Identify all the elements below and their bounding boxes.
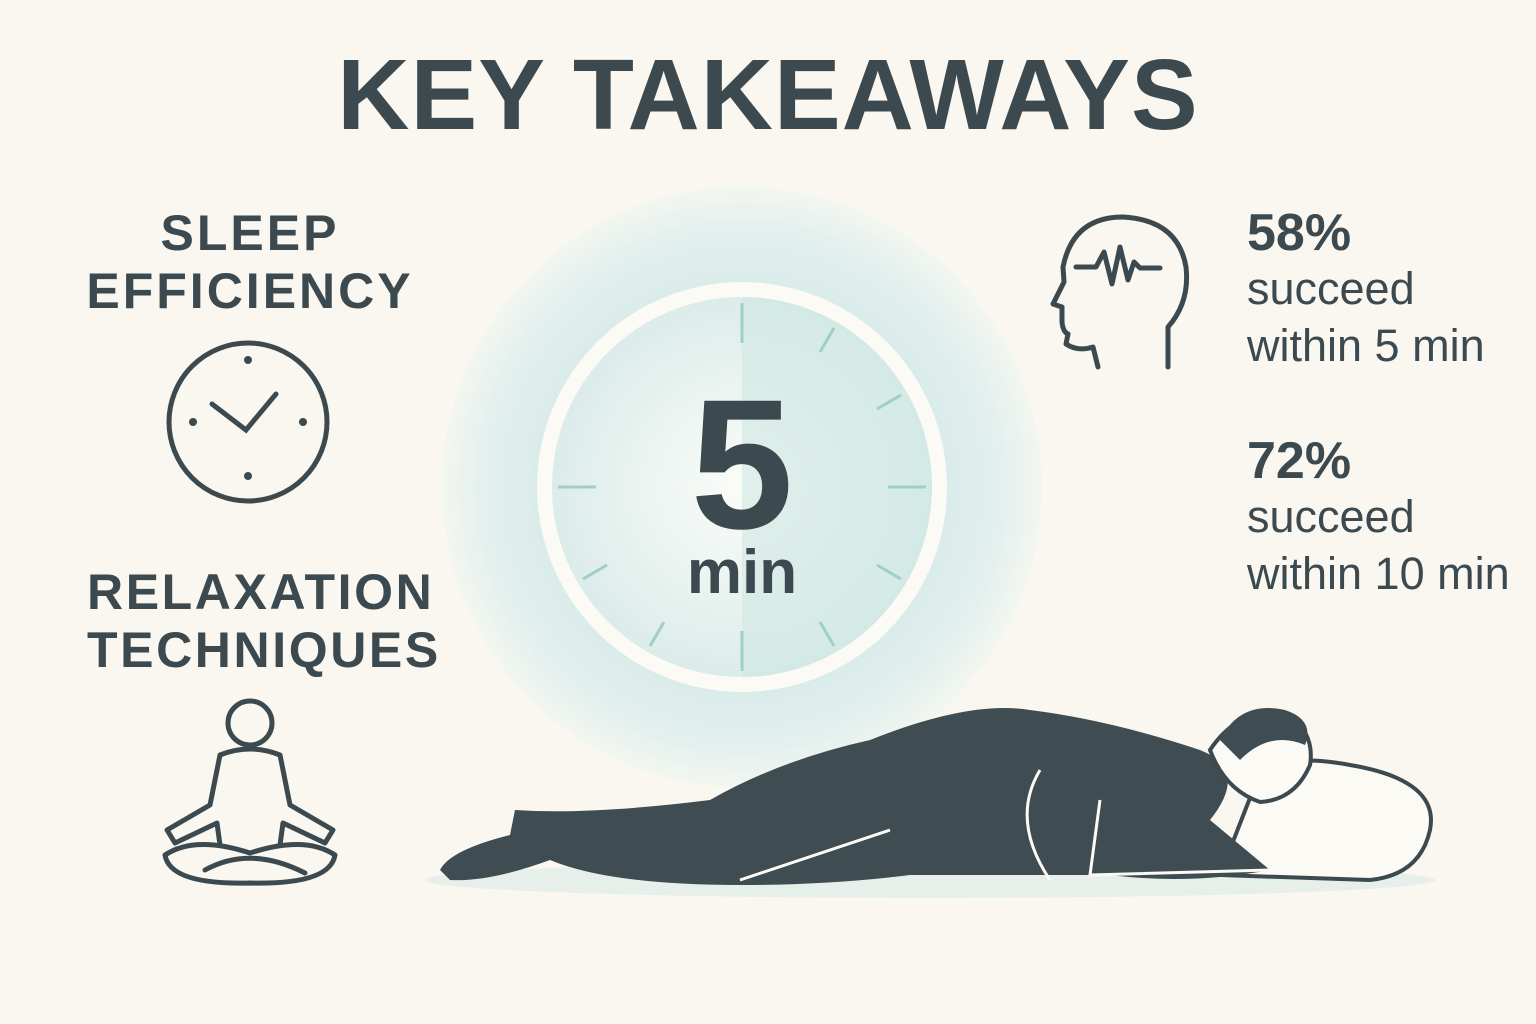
title: KEY TAKEAWAYS xyxy=(337,39,1199,151)
icon: clock xyxy=(166,340,330,504)
chart: 5 minute timer xyxy=(448,193,1036,782)
stat: 72%: 72% xyxy=(1247,432,1351,490)
heading: sleep efficiency: EFFICIENCY xyxy=(86,263,414,319)
stat: 58%: 58% xyxy=(1247,204,1351,262)
label: 5 min: min xyxy=(687,538,797,607)
label: 5 min: 5 xyxy=(691,362,793,568)
heading: relaxation techniques: TECHNIQUES xyxy=(87,622,441,678)
heading: relaxation techniques xyxy=(87,564,441,678)
stat: 72%: succeed xyxy=(1247,491,1415,542)
stat: 72% xyxy=(1247,432,1510,599)
stat: 72%: within 10 min xyxy=(1247,548,1510,599)
heading: sleep efficiency: SLEEP xyxy=(161,205,339,261)
stat: 58%: succeed xyxy=(1247,263,1415,314)
illustration: sleeping person xyxy=(425,708,1435,898)
heading: sleep efficiency xyxy=(86,205,414,319)
stat: 58%: within 5 min xyxy=(1247,320,1485,371)
icon: head with brain wave xyxy=(1050,214,1190,370)
heading: relaxation techniques: RELAXATION xyxy=(87,564,434,620)
icon: meditation figure xyxy=(162,698,338,886)
stat: 58% xyxy=(1247,204,1485,371)
